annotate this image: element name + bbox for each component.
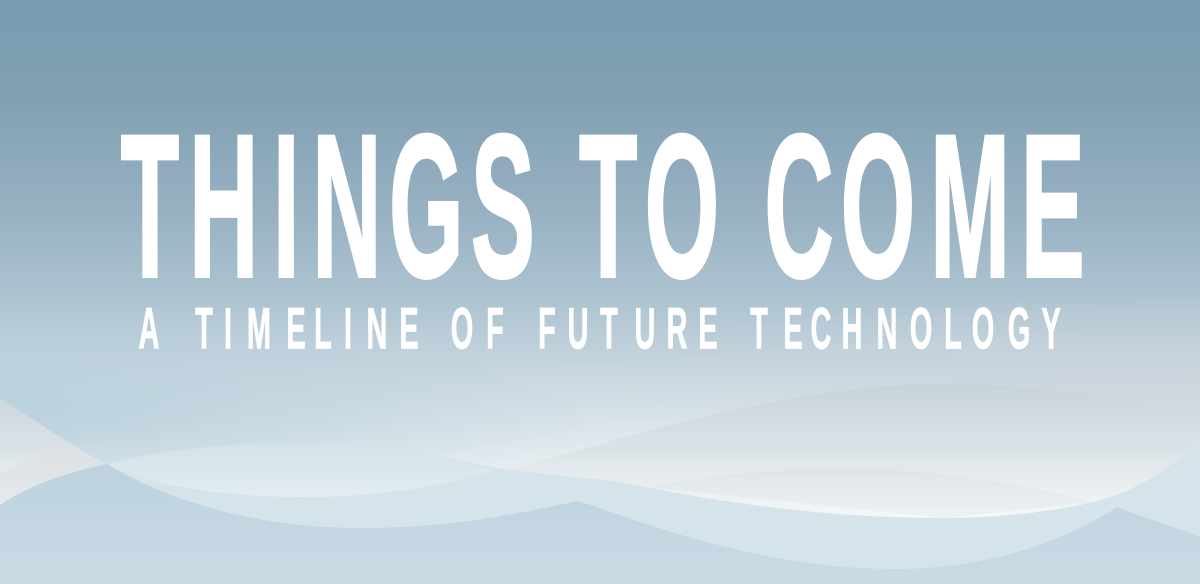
wave: inner grey lens: [646, 468, 1094, 518]
title: THINGS TO COME: [121, 92, 1085, 320]
wave layers: [0, 384, 1200, 584]
wave: light lens on the left: [107, 443, 497, 497]
wave: pale blue swell: [0, 440, 1200, 584]
wave: split in left wedge: [0, 448, 105, 505]
subtitle: A TIMELINE OF FUTURE TECHNOLOGY: [139, 295, 1061, 361]
wave: deep blue foreground: [0, 464, 1200, 584]
wave: grey upper swell: [0, 384, 1200, 584]
